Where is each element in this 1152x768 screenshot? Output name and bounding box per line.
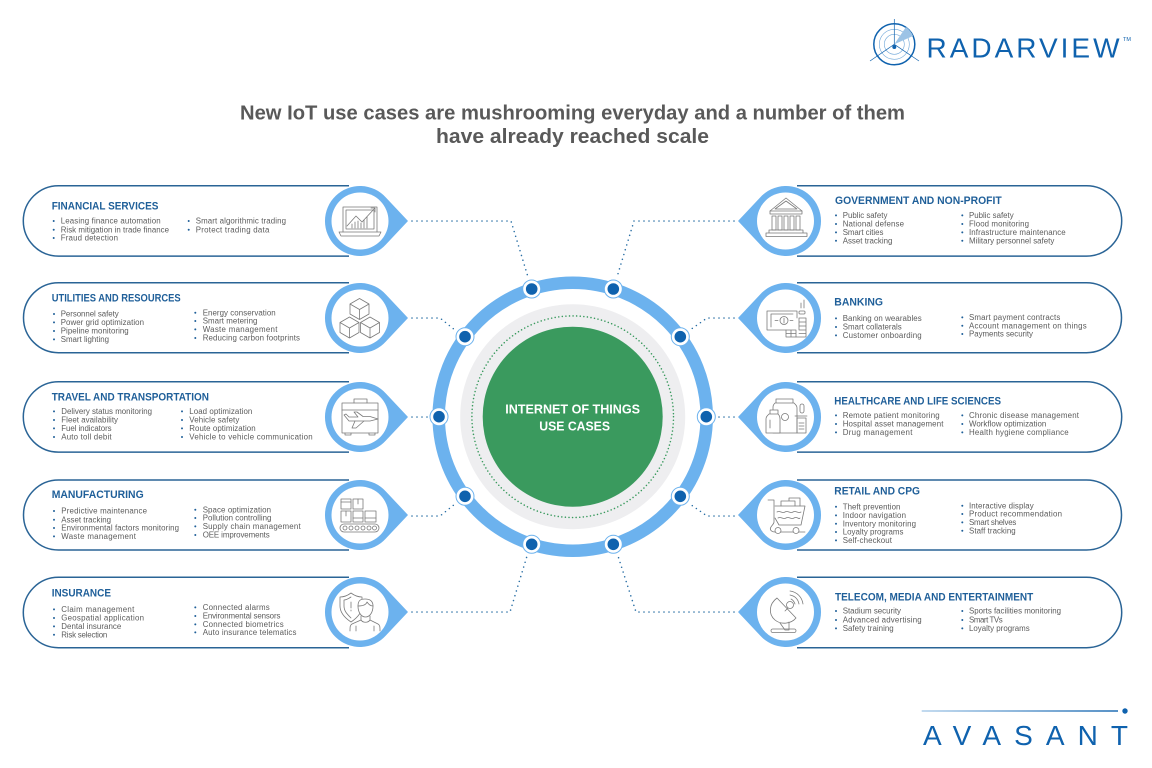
use case list: Workflow optimization: [969, 420, 1046, 429]
heading: INSURANCE: [52, 587, 111, 599]
use case list: [835, 211, 1066, 245]
use case list: National defense: [843, 220, 905, 229]
use case list: Flood monitoring: [969, 220, 1029, 229]
use case list: Asset tracking: [61, 515, 111, 524]
use case list: Waste management: [61, 532, 137, 541]
use case list: Remote patient monitoring: [843, 411, 940, 420]
outer blue ring: [439, 283, 707, 551]
icon: money and coins: [767, 300, 806, 337]
ring nodes: [430, 280, 715, 553]
use case list: Energy conservation: [203, 308, 276, 317]
panel: travel and transportation: [23, 382, 408, 452]
use case list: [53, 217, 286, 243]
use case list: Smart lighting: [61, 335, 109, 344]
use case list: Smart collaterals: [843, 323, 902, 332]
use case list: Geospatial application: [61, 614, 144, 623]
use case list: Pollution controlling: [203, 514, 271, 523]
use case list: [835, 313, 1087, 340]
panel: banking: [738, 283, 1122, 353]
use case list: Smart TVs: [969, 616, 1003, 625]
heading: TRAVEL AND TRANSPORTATION: [52, 392, 209, 404]
use case list: Public safety: [843, 211, 887, 220]
panel: financial services: [23, 186, 408, 256]
use case list: Fraud detection: [61, 234, 118, 243]
use case list: Self-checkout: [843, 536, 893, 545]
use case list: Risk mitigation in trade finance: [61, 225, 170, 234]
use case list: Waste management: [203, 325, 278, 334]
use case list: Loyalty programs: [843, 528, 903, 537]
use case list: Infrastructure maintenance: [969, 228, 1066, 237]
use case list: Advanced advertising: [843, 616, 922, 625]
use case list: Connected biometrics: [203, 620, 284, 629]
use case list: Auto toll debit: [61, 433, 112, 442]
logo: RadarView: TM: [1123, 37, 1131, 43]
use case list: Safety training: [843, 624, 894, 633]
icon: laptop chart: [339, 207, 381, 236]
use case list: Inventory monitoring: [843, 519, 916, 528]
dotted ring: [472, 316, 674, 518]
logo: RadarView: [870, 19, 1131, 65]
logo: RadarView: RADARVIEW: [926, 33, 1120, 64]
use case list: [53, 407, 313, 442]
use case list: Chronic disease management: [969, 411, 1080, 420]
use case list: Account management on things: [969, 321, 1087, 330]
use case list: [835, 411, 1080, 437]
use case list: Power grid optimization: [61, 318, 144, 327]
use case list: Leasing finance automation: [61, 217, 161, 226]
use case list: Fuel indicators: [61, 424, 112, 433]
use case list: Smart algorithmic trading: [196, 217, 286, 226]
use case list: [53, 505, 301, 541]
use case list: Environmental sensors: [203, 612, 280, 621]
hub label: [505, 402, 640, 434]
use case list: Banking on wearables: [843, 314, 922, 323]
use case list: Stadium security: [843, 607, 901, 616]
use case list: [835, 607, 1061, 633]
use case list: Supply chain management: [203, 522, 301, 531]
heading: UTILITIES AND RESOURCES: [52, 293, 181, 305]
use case list: Customer onboarding: [843, 331, 922, 340]
use case list: Route optimization: [189, 424, 256, 433]
panel: telecom, media and entertainment: [738, 577, 1122, 648]
panel: manufacturing: [24, 480, 408, 550]
central hub diagram: [430, 280, 715, 553]
use case list: Vehicle safety: [189, 416, 239, 425]
use case list: Environmental factors monitoring: [61, 524, 179, 533]
use case list: Public safety: [969, 211, 1014, 220]
use case list: Theft prevention: [843, 502, 900, 511]
hub label: USE CASES: [539, 419, 610, 434]
use case list: [53, 308, 300, 344]
use case list: Predictive maintenance: [61, 507, 148, 516]
icon: medicine bottles: [766, 399, 807, 433]
use case list: Claim management: [61, 605, 135, 614]
use case list: Auto insurance telematics: [203, 628, 296, 637]
use case list: Asset tracking: [843, 236, 892, 245]
use case list: Protect trading data: [196, 225, 270, 234]
use case list: Sports facilities monitoring: [969, 607, 1061, 616]
use case list: Smart metering: [203, 317, 257, 326]
use case list: Load optimization: [189, 407, 252, 416]
connector lines: [412, 221, 734, 612]
use case list: OEE improvements: [203, 531, 270, 540]
use case list: Personnel safety: [61, 310, 119, 319]
use case list: Drug management: [843, 428, 913, 437]
icon: conveyor with boxes: [340, 499, 379, 532]
heading: BANKING: [834, 297, 883, 309]
use case list: Fleet availability: [61, 416, 118, 425]
panel: insurance: [23, 577, 408, 648]
green centre circle: [483, 327, 663, 507]
use case list: Hospital asset management: [843, 420, 944, 429]
use case list: Staff tracking: [969, 526, 1016, 535]
icon: cubes: [340, 298, 380, 338]
use case list: Dental insurance: [61, 622, 122, 631]
use case list: Payments security: [969, 330, 1033, 339]
use case list: Military personnel safety: [969, 236, 1054, 245]
hub label: INTERNET OF THINGS: [505, 402, 640, 416]
icon: satellite dish: [770, 591, 803, 632]
icon: government building: [766, 198, 807, 236]
heading: RETAIL AND CPG: [834, 486, 920, 498]
use case list: Indoor navigation: [843, 511, 906, 520]
panel: utilities and resources: [24, 283, 408, 353]
icon: briefcase and plane: [342, 399, 378, 435]
title: have already reached scale: [436, 126, 709, 148]
heading: FINANCIAL SERVICES: [52, 200, 158, 212]
panel: retail and cpg: [738, 480, 1122, 550]
use case list: Space optimization: [203, 505, 271, 514]
use case list: Interactive display: [969, 501, 1034, 510]
logo: Avasant: AVASANT: [923, 720, 1128, 751]
icon: shopping cart: [768, 498, 805, 534]
use case list: [835, 501, 1062, 545]
use case list: Smart payment contracts: [969, 313, 1060, 322]
use case list: Reducing carbon footprints: [203, 334, 300, 343]
use case list: [53, 603, 296, 639]
title: [240, 102, 905, 148]
grey disc: [460, 304, 685, 529]
use case list: Health hygiene compliance: [969, 428, 1069, 437]
icon: shield and person: [340, 593, 380, 631]
use case list: Pipeline monitoring: [61, 327, 129, 336]
use case list: Delivery status monitoring: [61, 407, 152, 416]
use case list: Risk selection: [61, 630, 107, 639]
heading: MANUFACTURING: [52, 489, 144, 501]
heading: HEALTHCARE AND LIFE SCIENCES: [834, 395, 1001, 407]
panel: healthcare and life sciences: [738, 382, 1122, 452]
heading: TELECOM, MEDIA AND ENTERTAINMENT: [835, 591, 1034, 603]
title: New IoT use cases are mushrooming everyday and a number of them: [240, 102, 905, 124]
heading: GOVERNMENT AND NON-PROFIT: [835, 195, 1002, 207]
use case list: Vehicle to vehicle communication: [189, 433, 313, 442]
use case list: Smart cities: [843, 228, 883, 237]
use case list: Product recommendation: [969, 510, 1062, 519]
panel: government and non-profit: [738, 186, 1122, 256]
use case list: Loyalty programs: [969, 624, 1030, 633]
use case list: Connected alarms: [203, 603, 270, 612]
use case list: Smart shelves: [969, 518, 1016, 527]
